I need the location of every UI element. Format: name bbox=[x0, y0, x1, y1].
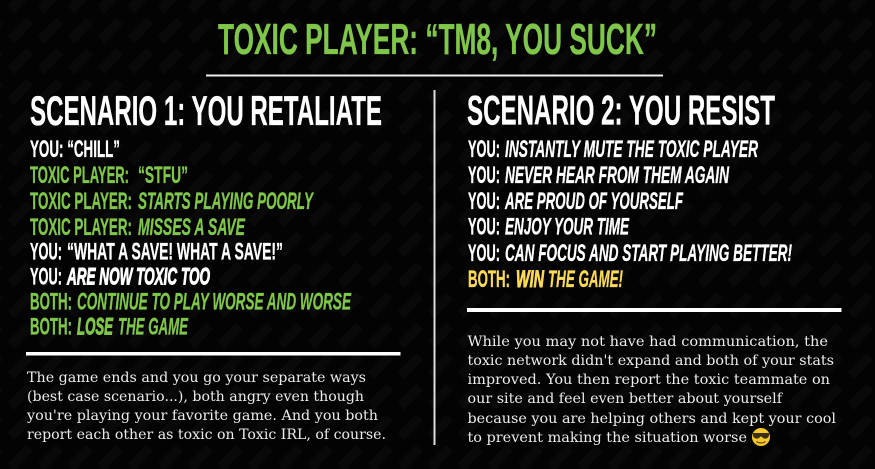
dialogue: scenario 2 bbox=[468, 136, 792, 293]
dialogue: scenario 2: YOU: bbox=[468, 214, 500, 240]
dialogue: scenario 1: TOXIC PLAYER: bbox=[30, 162, 129, 189]
summary: scenario 2: our site and feel even better about yourself bbox=[468, 391, 784, 407]
summary: scenario 2 bbox=[468, 334, 837, 446]
dialogue: scenario 1: “WHAT A SAVE! WHAT A SAVE!” bbox=[67, 238, 283, 266]
summary: scenario 1: (best case scenario...), both angry even though bbox=[27, 389, 364, 405]
dialogue: scenario 2: BOTH: bbox=[468, 266, 510, 293]
dialogue: scenario 2: THE GAME! bbox=[548, 266, 623, 293]
dialogue: scenario 1: STARTS PLAYING POORLY bbox=[138, 188, 314, 215]
dialogue: scenario 1 bbox=[30, 136, 352, 340]
summary: scenario 2: toxic network didn't expand and both of your stats bbox=[468, 353, 834, 369]
column divider bbox=[434, 90, 436, 445]
dialogue: scenario 1: THE GAME bbox=[118, 314, 189, 340]
dialogue: scenario 2: YOU: bbox=[468, 188, 500, 215]
summary: scenario 2: While you may not have had communication, the bbox=[468, 334, 828, 350]
dialogue: scenario 2: YOU: bbox=[468, 240, 500, 267]
dialogue: scenario 1: MISSES A SAVE bbox=[138, 214, 246, 241]
summary: scenario 1 bbox=[26, 370, 386, 443]
dialogue: scenario 2: YOU: bbox=[468, 136, 500, 163]
dialogue: scenario 1: YOU: bbox=[30, 238, 62, 266]
dialogue: scenario 1: BOTH: bbox=[30, 288, 72, 316]
dialogue: scenario 1: TOXIC PLAYER: bbox=[30, 214, 132, 241]
rule: scenario 2 bbox=[467, 308, 842, 312]
dialogue: scenario 1: TOXIC PLAYER: bbox=[30, 188, 132, 215]
summary: scenario 2: because you are helping others and kept your cool bbox=[468, 411, 837, 427]
dialogue: scenario 1: YOU: “CHILL” bbox=[30, 136, 120, 163]
dialogue: scenario 1: BOTH: bbox=[30, 314, 72, 340]
summary: scenario 1: report each other as toxic on Toxic IRL, of course. bbox=[27, 427, 386, 443]
title underline bbox=[206, 74, 663, 76]
rule: scenario 1 bbox=[26, 352, 400, 356]
icon: sunglasses emoji bbox=[752, 428, 770, 446]
panel: scenario 2 bbox=[467, 86, 842, 446]
summary: scenario 2: improved. You then report the toxic teammate on bbox=[468, 372, 830, 388]
dialogue: scenario 1: YOU: bbox=[30, 264, 62, 290]
dialogue: scenario 2: ENJOY YOUR TIME bbox=[505, 214, 630, 240]
dialogue: scenario 1: “STFU” bbox=[138, 162, 188, 189]
summary: scenario 1: The game ends and you go your separate ways bbox=[27, 370, 366, 386]
dialogue: scenario 1: LOSE bbox=[77, 314, 114, 340]
panel: scenario 1 bbox=[26, 87, 401, 443]
summary: scenario 2: to prevent making the situation worse bbox=[468, 430, 747, 446]
dialogue: scenario 2: YOU: bbox=[468, 162, 500, 189]
summary: scenario 1: you're playing your favorite game. And you both bbox=[26, 408, 378, 424]
dialogue: scenario 1: CONTINUE TO PLAY WORSE AND WORSE bbox=[77, 288, 352, 316]
heading: scenario 1: SCENARIO 1: YOU RETALIATE bbox=[30, 87, 382, 134]
dialogue: scenario 1: ARE NOW TOXIC TOO bbox=[66, 264, 210, 290]
dialogue: scenario 2: ARE PROUD OF YOURSELF bbox=[504, 188, 684, 215]
dialogue: scenario 2: WIN bbox=[516, 266, 544, 293]
